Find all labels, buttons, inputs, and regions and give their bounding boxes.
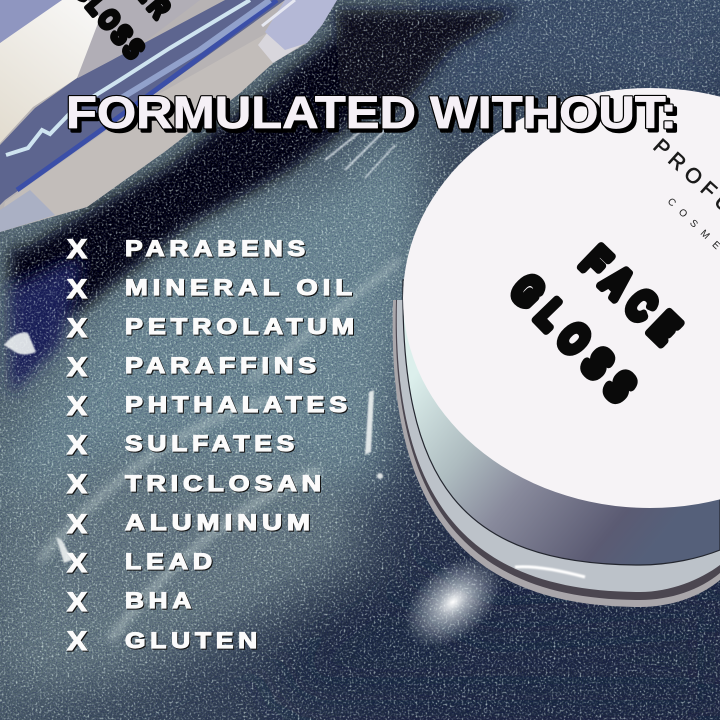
lip gloss tube	[0, 0, 337, 232]
excluded ingredients list	[67, 234, 359, 656]
title: FORMULATED WITHOUT:	[66, 87, 677, 138]
item: parabens: X	[67, 234, 87, 264]
tube label area	[62, 0, 200, 78]
item: paraffins	[67, 352, 321, 382]
item: paraffins: X	[67, 352, 87, 382]
item: gluten: GLUTEN	[125, 628, 262, 653]
tube right highlight	[265, 0, 337, 50]
item: triclosan: TRICLOSAN	[125, 471, 326, 496]
item: phthalates: PHTHALATES	[125, 392, 352, 417]
tube reflection streaks	[6, 0, 250, 155]
item: lead: LEAD	[125, 549, 217, 574]
item: bha: BHA	[125, 588, 196, 613]
glossy smears	[4, 332, 383, 563]
light flare	[387, 538, 519, 666]
applicator puff	[0, 0, 100, 143]
item: petrolatum	[67, 313, 359, 343]
item: triclosan: X	[67, 469, 87, 499]
item: aluminum: X	[67, 509, 87, 539]
item: phthalates: X	[67, 391, 87, 421]
title: FORMULATED WITHOUT:	[66, 87, 677, 138]
jar outer glass rim	[393, 300, 720, 607]
item: aluminum	[67, 509, 315, 539]
jar inner glass band	[397, 300, 720, 592]
item: bha	[67, 587, 196, 617]
product name: FACE	[573, 238, 689, 352]
item: mineral oil: MINERAL OIL	[125, 275, 357, 300]
item: paraffins: PARAFFINS	[125, 353, 321, 378]
item: phthalates	[67, 391, 352, 421]
product name: GLOSS	[503, 266, 645, 410]
item: lead	[67, 548, 217, 578]
jar lid top	[403, 88, 720, 508]
item: mineral oil: X	[67, 274, 87, 304]
item: sulfates: SULFATES	[125, 431, 299, 456]
light streaks near tube	[325, 120, 395, 178]
item: parabens	[67, 234, 310, 264]
item: aluminum: ALUMINUM	[125, 510, 315, 535]
product name	[503, 238, 689, 410]
item: triclosan	[67, 469, 326, 499]
item: bha: X	[67, 587, 87, 617]
item: petrolatum: X	[67, 313, 87, 343]
jar	[393, 88, 720, 607]
jar dark powder band	[396, 300, 720, 600]
item: gluten	[67, 626, 262, 656]
item: sulfates: X	[67, 430, 87, 460]
item: sulfates	[67, 430, 299, 460]
title: FORMULATED WITHOUT:	[69, 90, 680, 141]
item: parabens: PARABENS	[125, 236, 310, 261]
item: gluten: X	[67, 626, 87, 656]
item: petrolatum: PETROLATUM	[125, 314, 359, 339]
tube milky band	[0, 30, 305, 231]
item: lead: X	[67, 548, 87, 578]
item: mineral oil	[67, 274, 357, 304]
jar lid side	[403, 280, 720, 565]
tube glass band	[0, 0, 285, 205]
